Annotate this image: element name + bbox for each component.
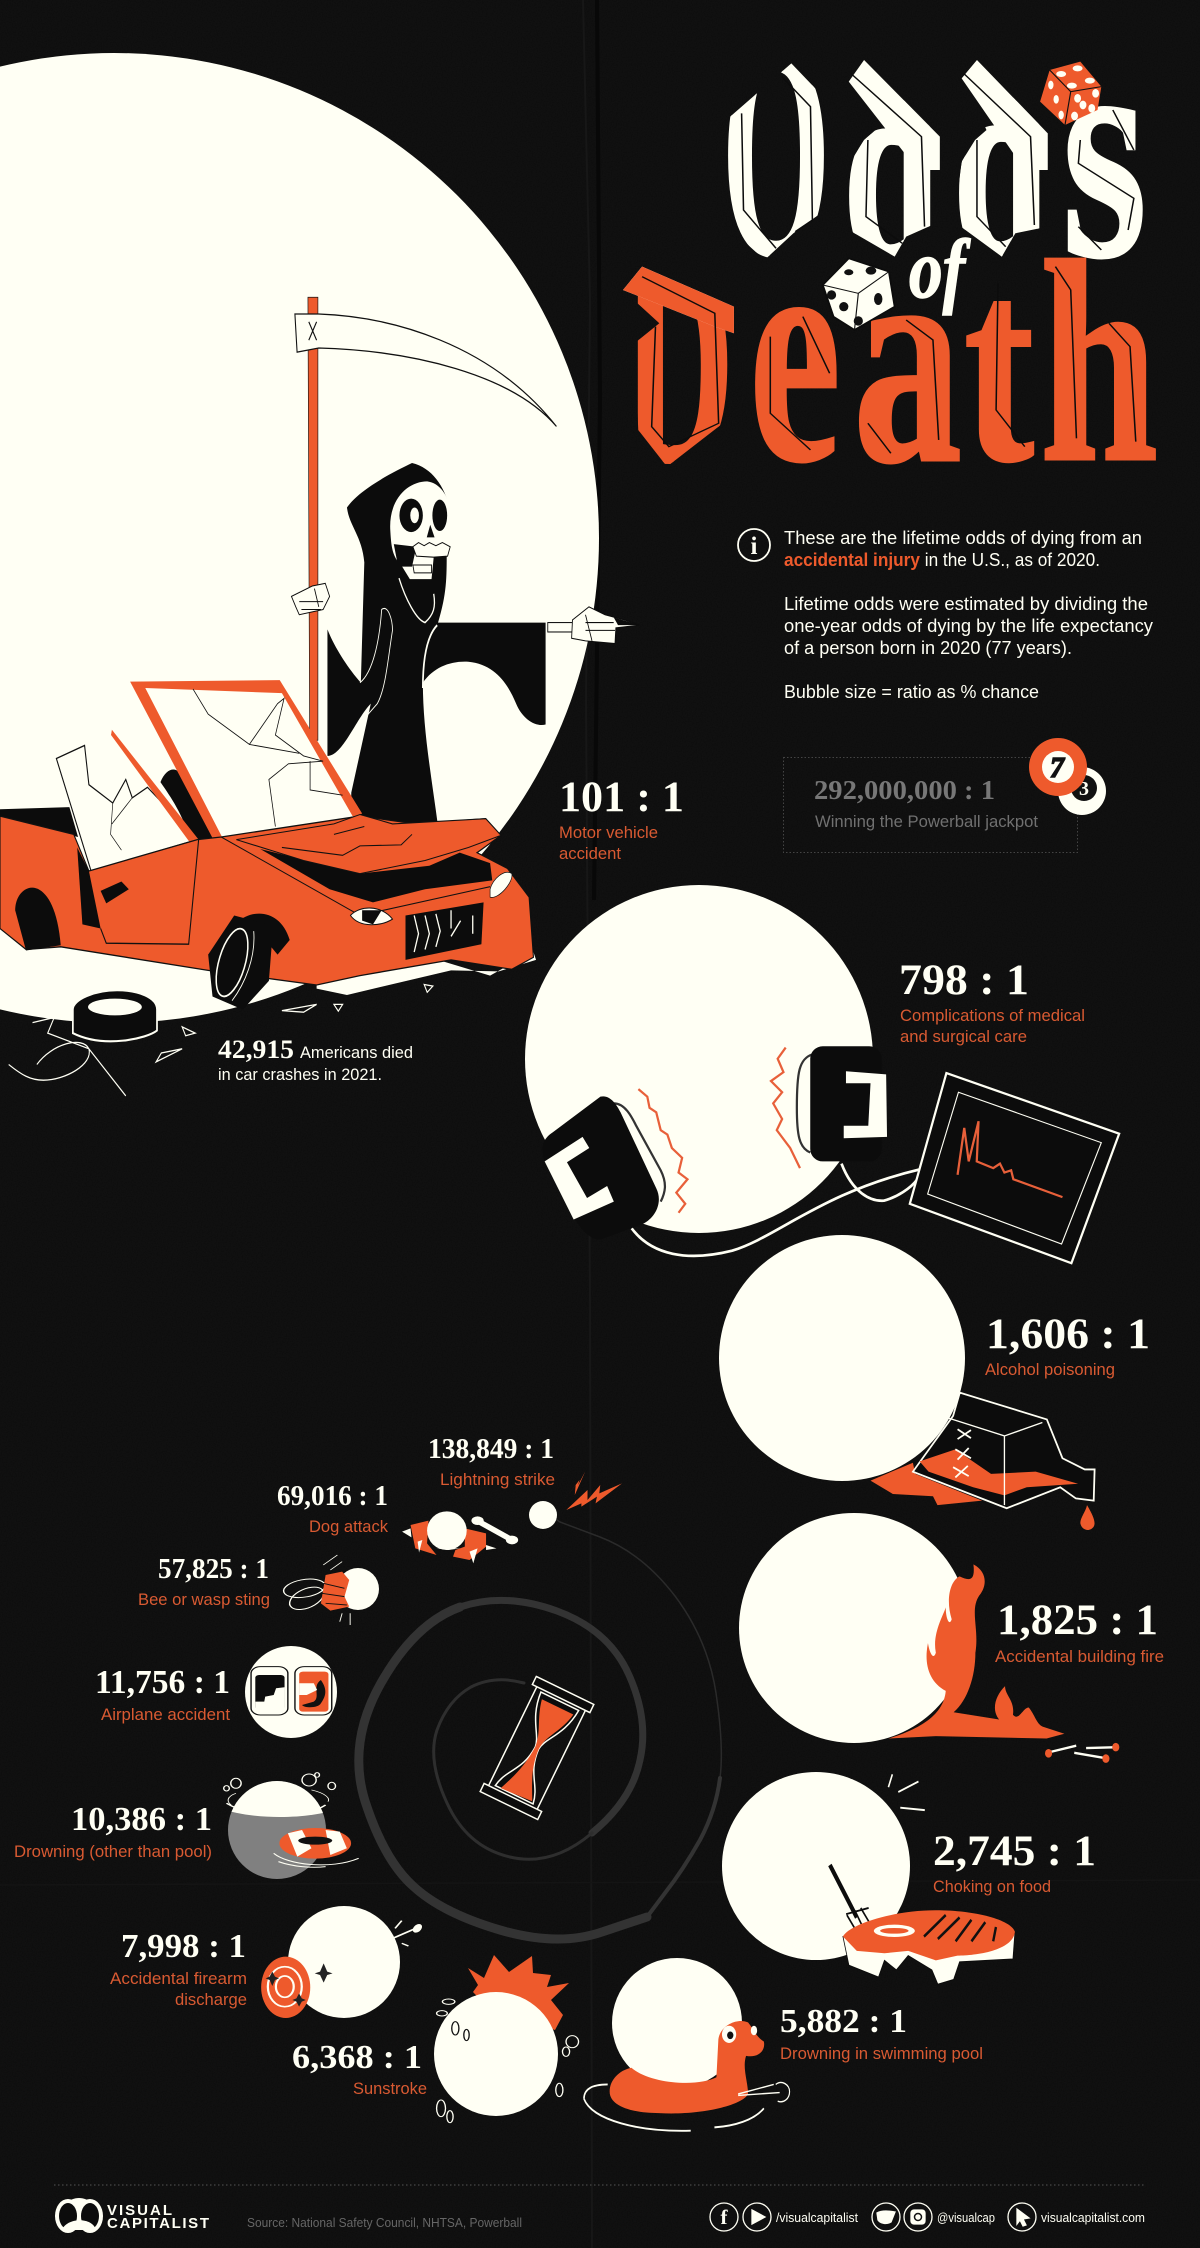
bubble: motor vehicle accident xyxy=(0,53,599,1023)
icon: info xyxy=(738,529,770,561)
spiral of time xyxy=(359,1514,721,1939)
stat: medical care xyxy=(899,957,1085,1046)
stat: car crash deaths: Americans died xyxy=(300,1044,413,1062)
stat: firearm: Accidental firearm xyxy=(110,1969,247,1988)
logo xyxy=(55,2198,209,2233)
stat: drowning other than pool: 10,386 : 1 xyxy=(71,1801,212,1838)
stat: building fire: Accidental building fire xyxy=(995,1647,1164,1666)
illustration: target and bullet xyxy=(261,1921,424,2018)
bubble: building fire xyxy=(739,1513,969,1743)
illustration: grim reaper xyxy=(291,297,640,827)
illustration: hourglass xyxy=(480,1676,594,1820)
stat: sunstroke xyxy=(292,2039,427,2098)
stat: motor vehicle accident: accident xyxy=(559,844,621,863)
icon: info: i xyxy=(751,533,758,560)
bubble: choking on food xyxy=(722,1772,910,1960)
stat: choking on food xyxy=(933,1828,1096,1896)
bubble: drowning in swimming pool xyxy=(612,1958,742,2088)
bubble: alcohol poisoning xyxy=(719,1235,965,1481)
stat: alcohol poisoning: Alcohol poisoning xyxy=(985,1360,1115,1379)
stat: sunstroke: Sunstroke xyxy=(353,2079,427,2098)
stat: building fire: 1,825 : 1 xyxy=(997,1597,1158,1644)
stat: bee or wasp sting xyxy=(138,1554,270,1609)
stat: firearm xyxy=(110,1928,247,2009)
divider and footer: @visualcap xyxy=(937,2211,995,2225)
divider and footer: visualcapitalist.com xyxy=(1041,2211,1145,2225)
bubble: drowning other than pool xyxy=(228,1781,326,1879)
stat: lightning strike: Lightning strike xyxy=(440,1470,555,1489)
stat: drowning other than pool xyxy=(14,1801,212,1861)
bubble: airplane accident xyxy=(245,1646,337,1738)
bubble: firearm discharge xyxy=(288,1906,400,2018)
panel: powerball comparison xyxy=(784,738,1106,852)
illustration: life ring xyxy=(224,1773,359,1867)
stat: motor vehicle accident: Motor vehicle xyxy=(559,823,658,842)
panel: powerball comparison: 292,000,000 : 1 xyxy=(814,775,995,805)
title: a xyxy=(853,188,962,526)
illustration: defibrillator xyxy=(542,1046,1119,1263)
stat: alcohol poisoning: 1,606 : 1 xyxy=(986,1311,1150,1358)
intro text: These are the lifetime odds of dying from an xyxy=(784,528,1142,548)
logo: VISUAL xyxy=(107,2202,172,2219)
stat: building fire xyxy=(995,1597,1164,1666)
logo: CAPITALIST xyxy=(107,2215,209,2232)
bubble: medical and surgical care xyxy=(525,885,873,1233)
illustration: sweat drops xyxy=(437,1999,579,2123)
illustration: crashed car xyxy=(0,680,536,1010)
stat: firearm: discharge xyxy=(175,1990,247,2009)
stat: dog attack xyxy=(277,1481,388,1536)
stat: car crash deaths: 42,915 xyxy=(218,1035,294,1064)
stat: car crash deaths: in car crashes in 2021. xyxy=(218,1066,382,1084)
title: D xyxy=(623,199,734,527)
stat: bee or wasp sting: 57,825 : 1 xyxy=(158,1554,269,1585)
title xyxy=(623,60,1156,464)
stat: car crash deaths xyxy=(218,1035,413,1084)
title: e xyxy=(749,175,841,529)
stat: motor vehicle accident xyxy=(559,774,684,863)
stat: sunstroke: 6,368 : 1 xyxy=(292,2039,422,2076)
illustration: red die xyxy=(1040,62,1101,125)
stat: choking on food: 2,745 : 1 xyxy=(933,1828,1096,1875)
bubble: lightning strike xyxy=(529,1501,557,1529)
divider and footer: /visualcapitalist xyxy=(776,2211,858,2225)
stat: lightning strike: 138,849 : 1 xyxy=(428,1434,554,1465)
bubble: sunstroke xyxy=(434,1955,569,2116)
illustration: tyre and wreckage xyxy=(9,984,433,1096)
stat: medical care: 798 : 1 xyxy=(899,957,1029,1004)
title: of xyxy=(909,223,971,316)
illustration: spilled bottle xyxy=(871,1393,1095,1530)
illustration: white die xyxy=(823,258,895,330)
illustration: duck float xyxy=(584,2021,790,2131)
bubble: bee or wasp sting xyxy=(337,1568,379,1610)
intro text: Lifetime odds were estimated by dividing the xyxy=(784,594,1148,614)
social links xyxy=(710,2203,1036,2231)
intro text: accidental injury in the U.S., as of 2020. xyxy=(784,550,1100,570)
stat: swimming pool: 5,882 : 1 xyxy=(780,2003,907,2040)
stat: swimming pool xyxy=(780,2003,983,2063)
panel: powerball comparison: Winning the Powerball jackpot xyxy=(815,812,1038,831)
illustration: lightning bolts xyxy=(565,1472,622,1510)
intro text xyxy=(784,528,1153,702)
stat: airplane accident: 11,756 : 1 xyxy=(95,1664,230,1701)
title: d xyxy=(953,13,1049,314)
intro text: of a person born in 2020 (77 years). xyxy=(784,638,1072,658)
illustration: airplane windows xyxy=(251,1667,332,1715)
divider and footer: f xyxy=(720,2205,728,2229)
stat: dog attack: Dog attack xyxy=(309,1517,388,1536)
stat: swimming pool: Drowning in swimming pool xyxy=(780,2044,983,2063)
stat: dog attack: 69,016 : 1 xyxy=(277,1481,388,1512)
stat: drowning other than pool: Drowning (other than pool) xyxy=(14,1842,212,1861)
intro text: one-year odds of dying by the life expectancy xyxy=(784,616,1153,636)
stat: choking on food: Choking on food xyxy=(933,1877,1051,1896)
stat: airplane accident: Airplane accident xyxy=(101,1705,230,1724)
panel: powerball comparison: 7 xyxy=(1050,753,1065,784)
title: t xyxy=(964,212,1036,520)
stat: airplane accident xyxy=(95,1664,230,1724)
title: d xyxy=(843,16,940,317)
panel: powerball comparison: 3 xyxy=(1079,778,1089,800)
illustration: bee xyxy=(281,1555,350,1625)
stat: bee or wasp sting: Bee or wasp sting xyxy=(138,1590,270,1609)
stat: motor vehicle accident: 101 : 1 xyxy=(559,774,684,821)
source: Source: National Safety Council, NHTSA, Powerball xyxy=(247,2215,522,2230)
illustration: steak and fork xyxy=(830,1774,1015,1984)
divider and footer xyxy=(54,2185,1145,2233)
title: h xyxy=(1040,203,1158,522)
stat: alcohol poisoning xyxy=(985,1311,1150,1379)
stat: medical care: and surgical care xyxy=(900,1027,1027,1046)
stat: lightning strike xyxy=(428,1434,555,1489)
illustration: fire xyxy=(888,1564,1119,1763)
intro text: Bubble size = ratio as % chance xyxy=(784,682,1039,702)
stat: firearm: 7,998 : 1 xyxy=(121,1928,246,1965)
stat: medical care: Complications of medical xyxy=(900,1006,1085,1025)
illustration: dog collar and bone xyxy=(402,1511,518,1563)
